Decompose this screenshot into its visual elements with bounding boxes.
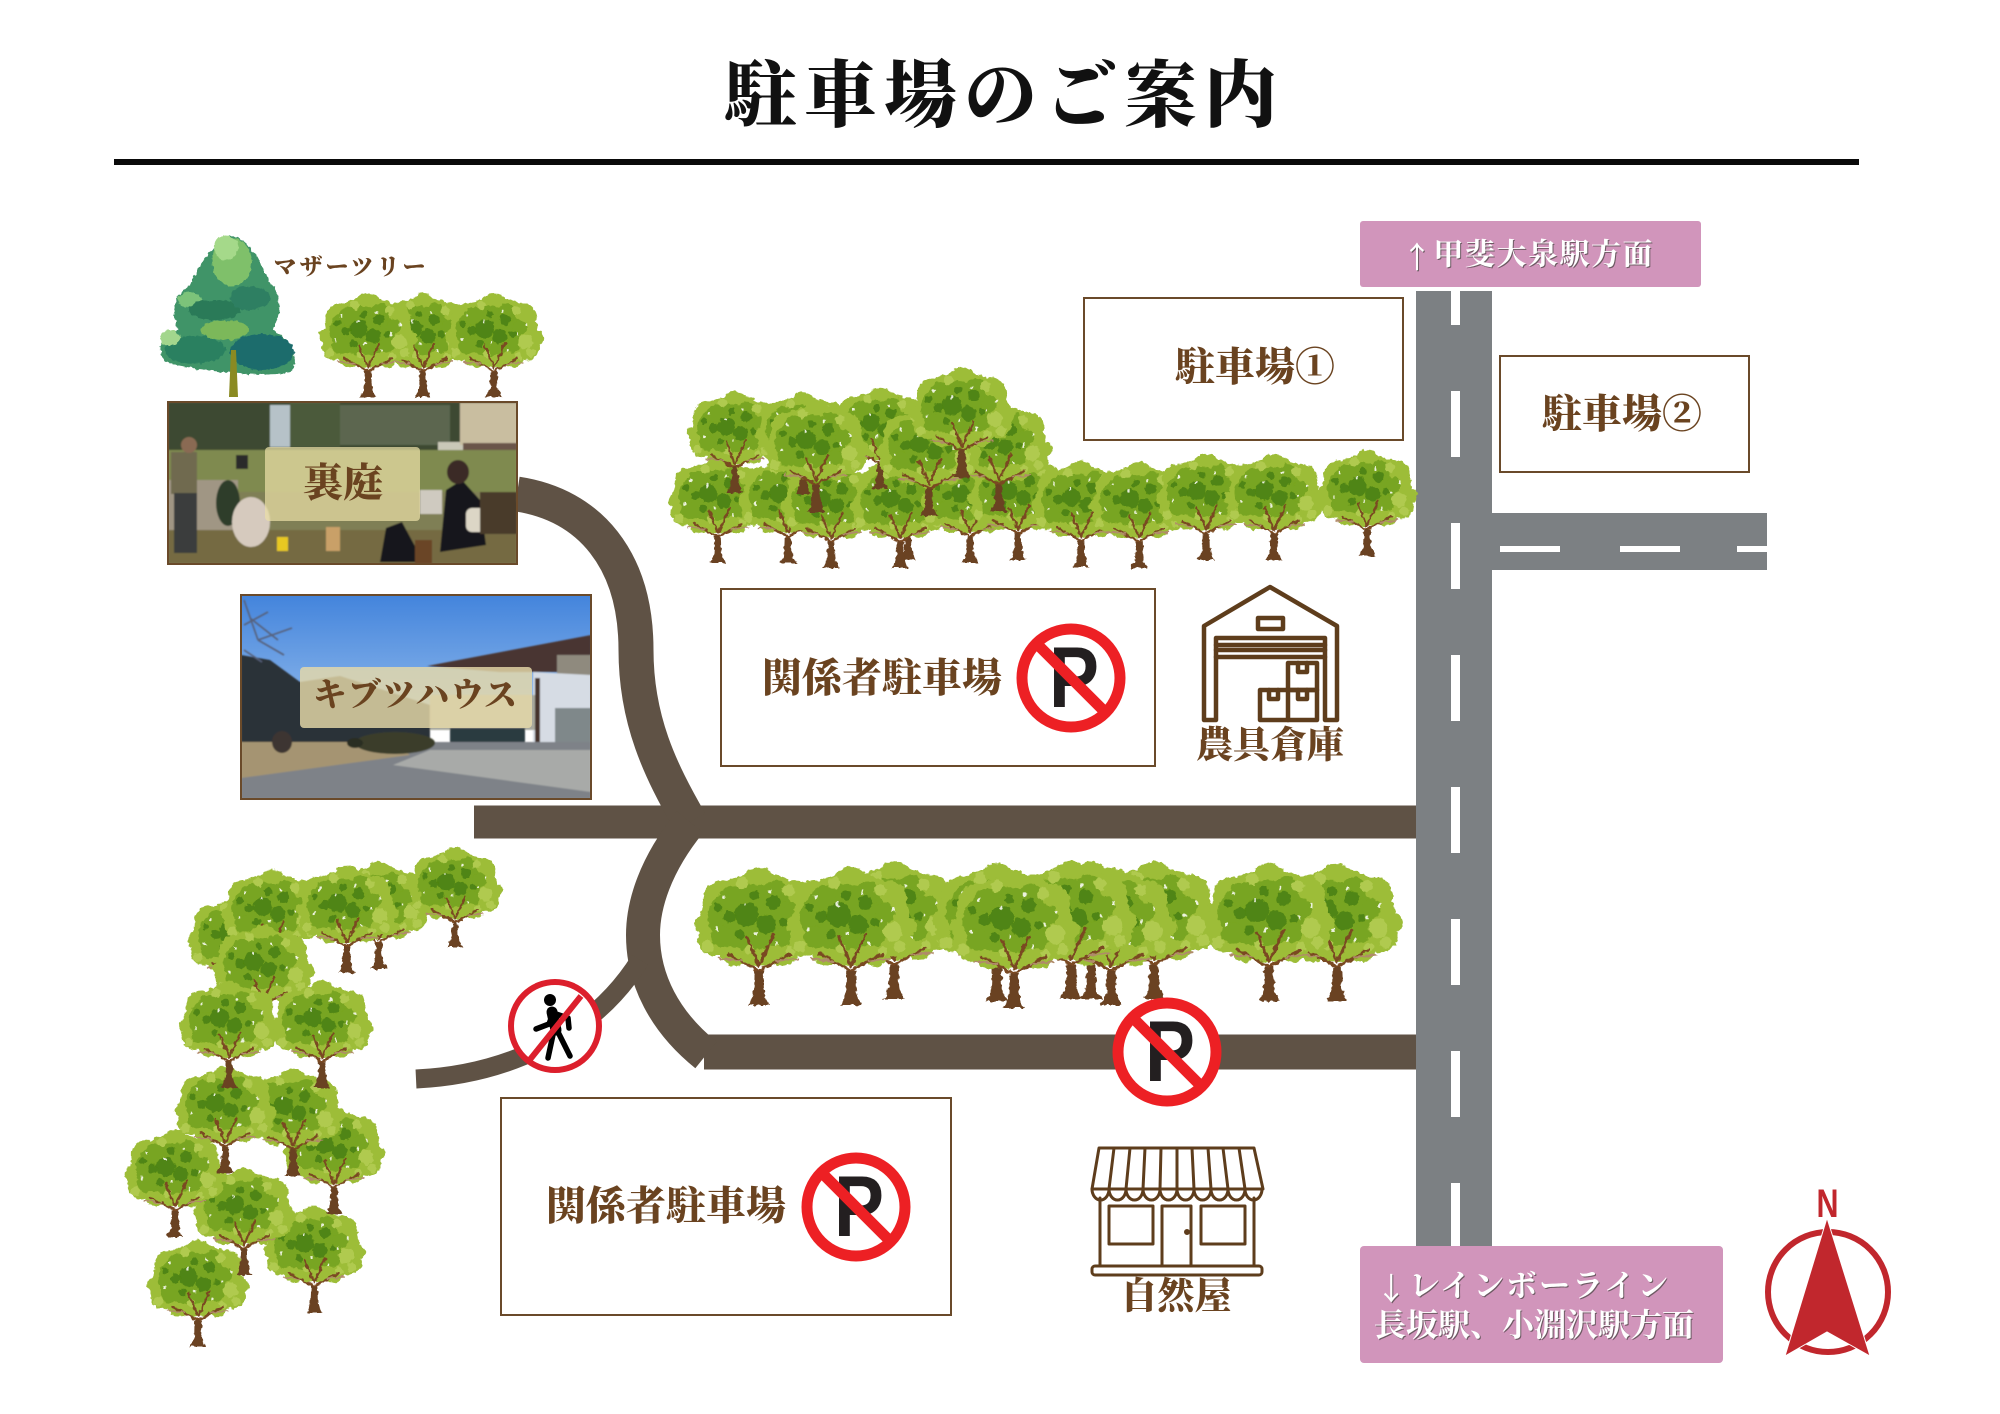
- trees: top-left row: [319, 293, 544, 397]
- main road: grey north-south with east branch: [1416, 291, 1767, 1249]
- box: staff parking, upper: 関係者駐車場: [762, 656, 1002, 700]
- icon: tool warehouse: [1204, 587, 1337, 720]
- photo: back yard: [168, 402, 517, 564]
- icon: mother tree: [160, 235, 295, 397]
- photo: Kibutsu House: [241, 595, 591, 799]
- box: parking lot 2: 駐車場②: [1540, 392, 1702, 436]
- brown access roads: [416, 494, 1416, 1079]
- box: staff parking, upper: [721, 589, 1155, 766]
- label: back yard: 裏庭: [303, 460, 383, 506]
- no parking sign on lower road: P: [1145, 1004, 1195, 1100]
- direction sign: south: [1360, 1246, 1723, 1363]
- icon: no parking sign: P: [834, 1159, 884, 1255]
- label: Shizenya store: 自然屋: [1120, 1276, 1232, 1318]
- box: staff parking, lower: 関係者駐車場: [546, 1184, 786, 1228]
- box: staff parking, lower: [501, 1098, 951, 1315]
- label: back yard: [265, 447, 420, 521]
- icon: no parking sign: P: [1049, 630, 1099, 726]
- icon: no parking sign: [807, 1158, 905, 1256]
- trees: upper centre grove: [668, 367, 1418, 568]
- no parking sign on lower road: [1118, 1003, 1216, 1101]
- icon: Shizenya store: [1092, 1148, 1263, 1275]
- box: parking lot 1: [1084, 298, 1403, 440]
- label: Kibutsu House: [300, 667, 532, 728]
- direction sign: north: ↑甲斐大泉駅方面: [1402, 233, 1654, 277]
- icon: north compass: N: [1816, 1182, 1838, 1226]
- label: mother tree: マザーツリー: [273, 254, 429, 280]
- no pedestrian sign: [511, 982, 599, 1070]
- label: Kibutsu House: キブツハウス: [313, 677, 519, 714]
- trees: lower centre row: [694, 861, 1403, 1008]
- icon: north compass: [1768, 1182, 1888, 1356]
- icon: no parking sign: [1022, 629, 1120, 727]
- direction sign: south: 長坂駅、小淵沢駅方面: [1374, 1307, 1694, 1343]
- label: tool warehouse: 農具倉庫: [1196, 724, 1344, 766]
- title: 駐車場のご案内: [720, 56, 1284, 136]
- direction sign: south: ↓レインボーライン: [1376, 1264, 1670, 1308]
- box: parking lot 1: 駐車場①: [1173, 344, 1335, 390]
- box: parking lot 2: [1500, 356, 1749, 472]
- trees: left cluster: [125, 848, 503, 1347]
- direction sign: north: [1360, 221, 1701, 287]
